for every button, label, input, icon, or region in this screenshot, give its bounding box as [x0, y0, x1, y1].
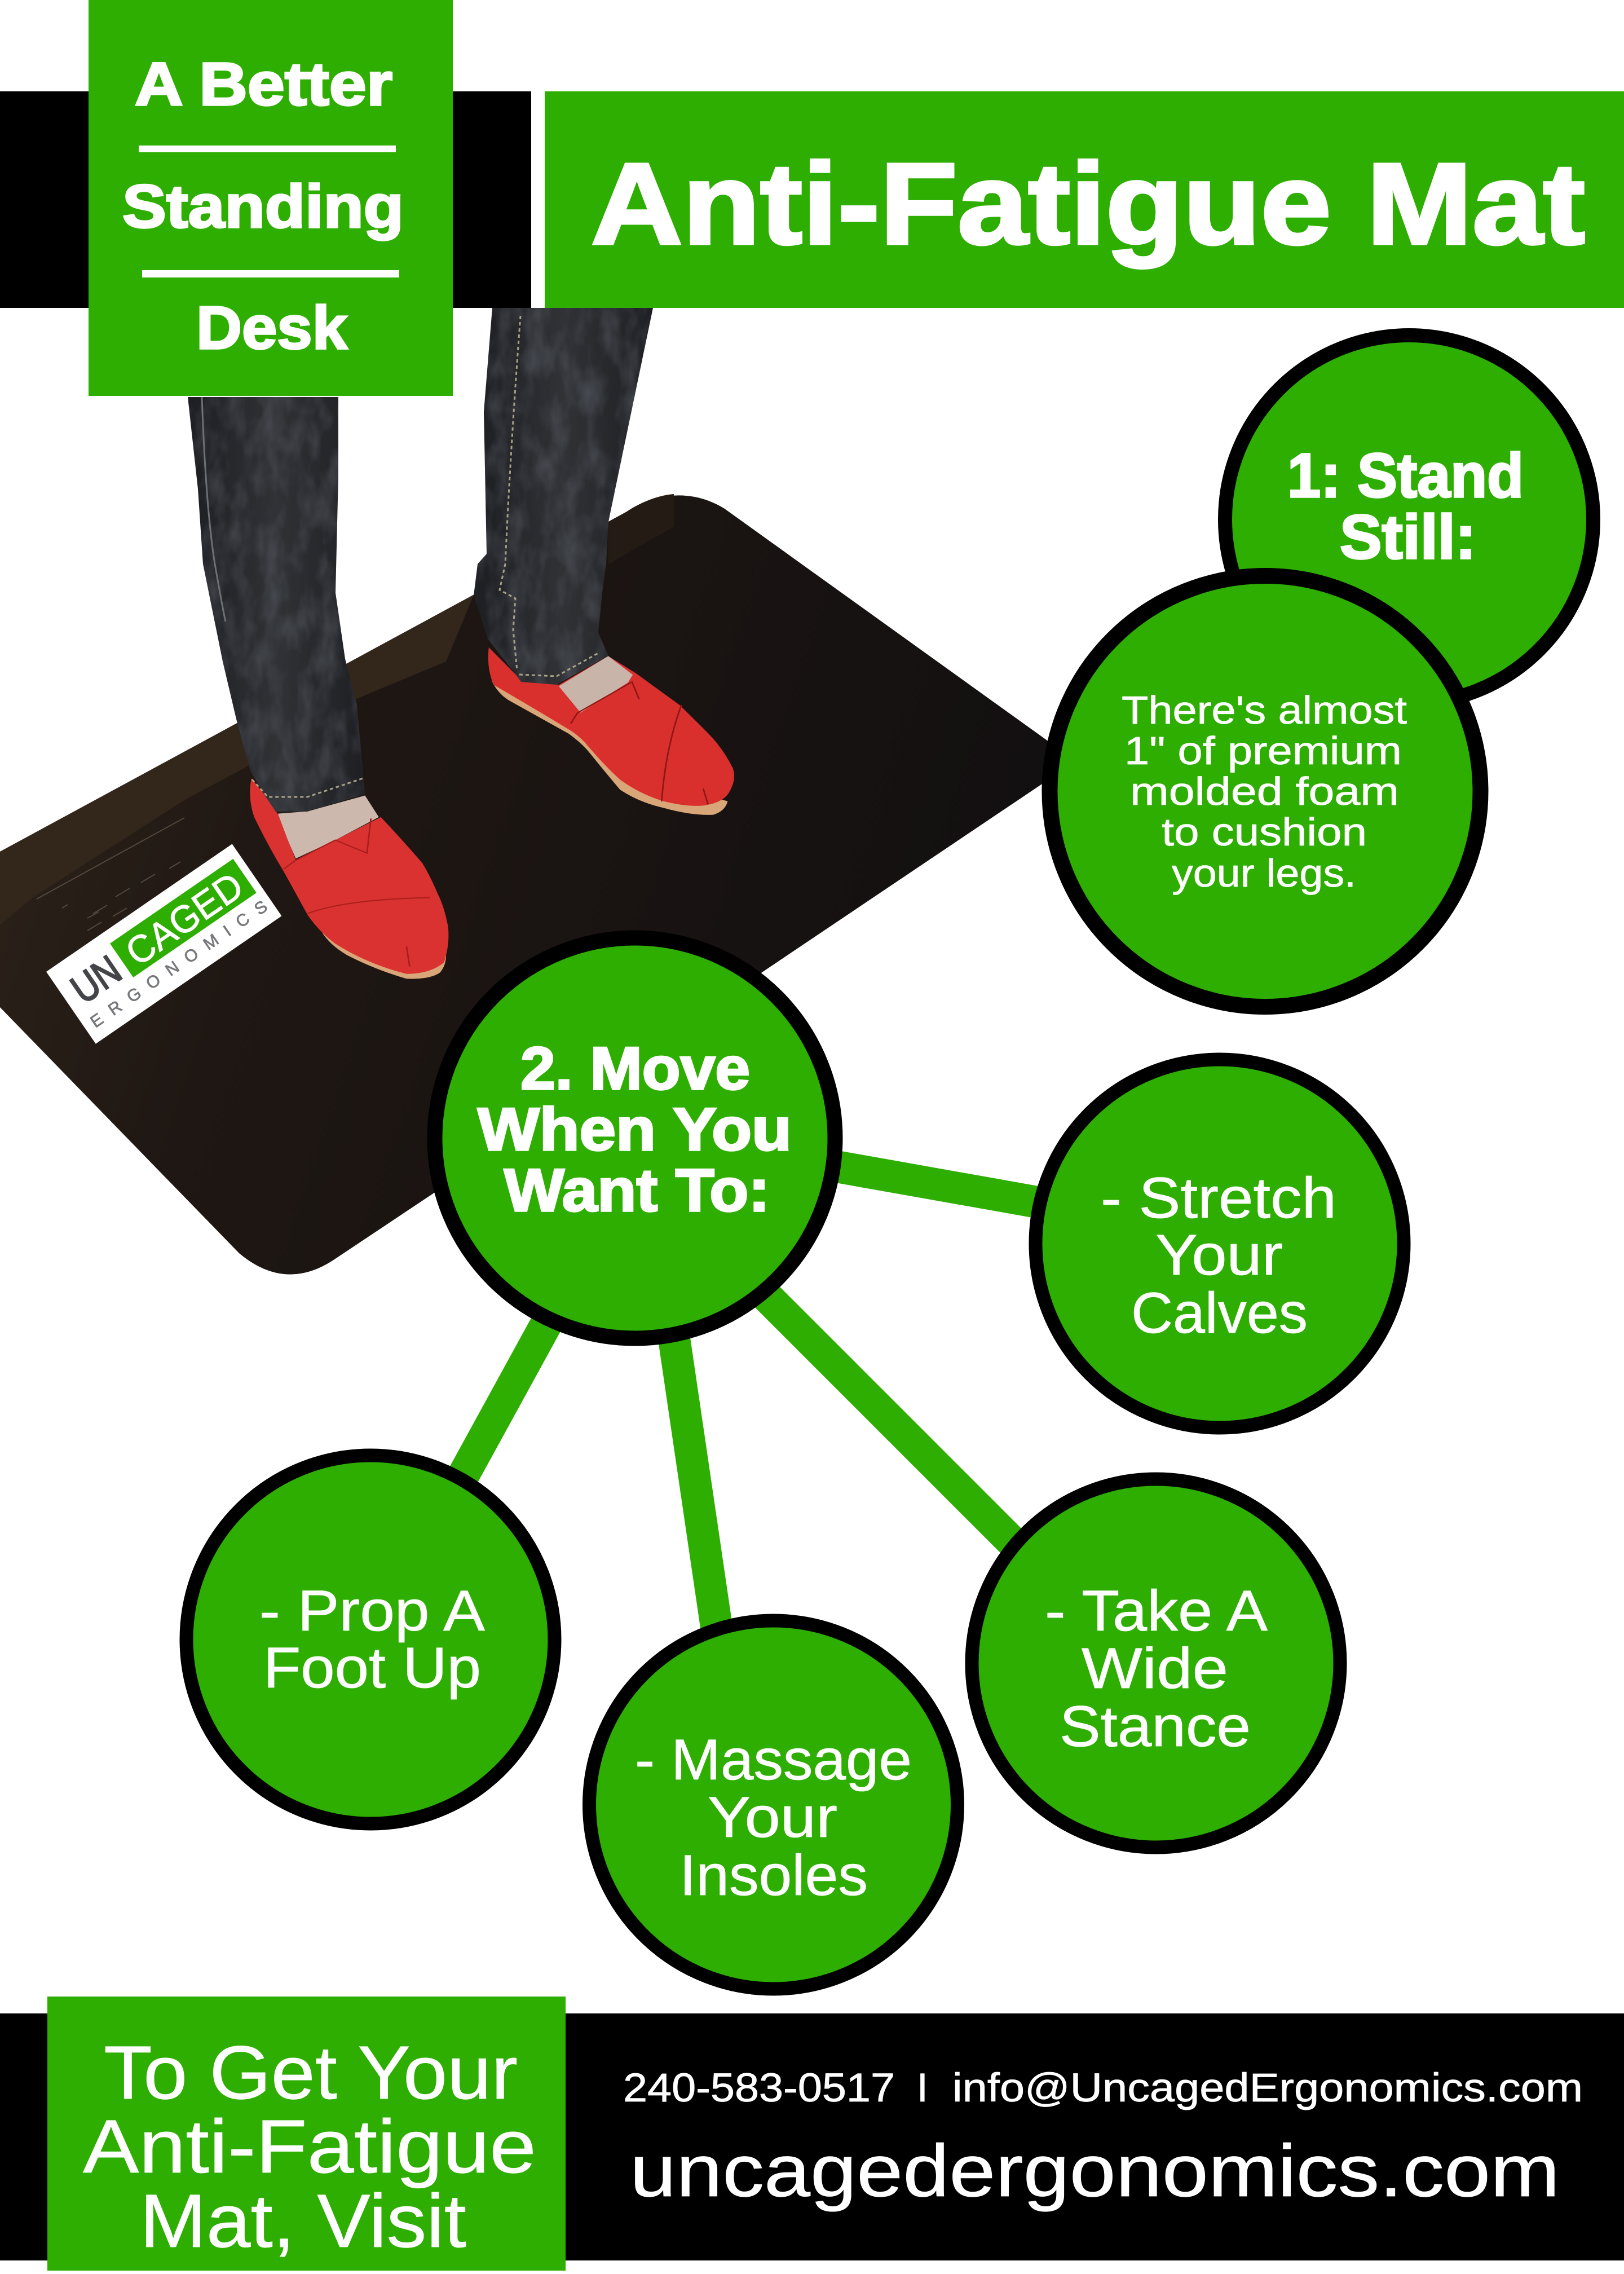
left jeans leg [188, 397, 365, 812]
heading line 2: When You [478, 1095, 792, 1163]
heading line 3: Want To: [504, 1156, 770, 1224]
right hem stitching [519, 653, 598, 676]
left shoe [250, 778, 448, 979]
mat brown band right of leg [608, 494, 674, 564]
text line 3: Calves [1131, 1281, 1308, 1345]
circle: Take A Wide Stance [972, 1479, 1340, 1848]
text line 2: Anti-Fatigue [83, 2105, 536, 2189]
text line 1: There's almost [1122, 688, 1407, 732]
rule 1 [139, 146, 396, 152]
footer black bar [0, 2013, 1624, 2260]
rule 2 [142, 270, 399, 277]
connector: move to stretch [635, 1131, 1220, 1235]
circle: Massage Your Insoles [589, 1621, 957, 1989]
text: A Better: A Better [135, 50, 392, 118]
left shoe sole [320, 928, 446, 979]
circle shape [589, 1621, 957, 1989]
heading line 1: 2. Move [520, 1034, 750, 1102]
right shoe upper [488, 647, 734, 806]
circle shape [435, 938, 835, 1338]
circle shape [972, 1479, 1340, 1848]
text line 1: - Take A [1045, 1579, 1268, 1643]
text line 3: Mat, Visit [140, 2179, 466, 2263]
connector: move to wide stance [677, 1206, 1100, 1629]
right shoe sole [492, 681, 728, 815]
text: Desk: Desk [196, 293, 348, 362]
mat brown top band [0, 595, 474, 925]
right leg shape [474, 308, 653, 685]
circle: Prop A Foot Up [186, 1455, 555, 1824]
text line 1: - Stretch [1101, 1166, 1336, 1230]
connector: move to prop [412, 1230, 598, 1570]
mat embossed text [37, 818, 184, 931]
text line 2: Your [1155, 1223, 1283, 1287]
right shoe foot [559, 656, 633, 713]
circle: foam description [1050, 576, 1481, 1007]
left hem stitching [252, 778, 363, 797]
circle shape [1225, 335, 1594, 704]
logo background [46, 844, 281, 1044]
panel: A Better Standing Desk [89, 0, 453, 396]
phone number: 240-583-0517 [623, 2066, 895, 2110]
text line 1: - Massage [635, 1727, 912, 1792]
banner background [545, 91, 1624, 308]
panel background [47, 1997, 566, 2271]
panel background [89, 0, 453, 396]
separator: I [917, 2066, 928, 2110]
website: uncagedergonomics.com [630, 2129, 1560, 2212]
circle shape [186, 1455, 555, 1824]
circle shape [1050, 576, 1481, 1007]
circle: Stretch Your Calves [1035, 1059, 1404, 1428]
left shoe upper [250, 778, 448, 974]
heading line 1: 1: Stand [1287, 441, 1524, 510]
email: info@UncagedErgonomics.com [952, 2066, 1583, 2110]
logo word CAGED: CAGED [118, 864, 251, 974]
text line 1: To Get Your [104, 2031, 518, 2115]
logo word ERGONOMICS: ERGONOMICS [87, 897, 271, 1032]
text line 4: to cushion [1162, 810, 1367, 854]
header: black bar [0, 91, 531, 308]
text line 3: Stance [1060, 1694, 1251, 1759]
mat [0, 495, 1060, 1275]
text line 2: Foot Up [263, 1636, 481, 1700]
photo: anti-fatigue mat with standing legs [0, 308, 1060, 1275]
text line 1: - Prop A [259, 1579, 485, 1643]
left shoe seams [284, 818, 430, 967]
title banner: Anti-Fatigue Mat [545, 91, 1624, 308]
right shoe seams [571, 682, 708, 804]
logo sticker [46, 844, 281, 1044]
left leg seam stitching [202, 397, 226, 622]
text line 5: your legs. [1172, 851, 1356, 895]
circle shape [1035, 1059, 1404, 1428]
call to action panel [47, 1997, 566, 2271]
title text: Anti-Fatigue Mat [591, 139, 1585, 268]
text line 3: Insoles [679, 1843, 868, 1907]
logo green block [110, 859, 257, 977]
footer: contact bar [0, 2013, 1624, 2260]
right shoe [488, 647, 734, 815]
circle: 1 Stand Still [1225, 335, 1594, 704]
heading line 2: Still: [1340, 503, 1476, 572]
left shoe foot [278, 796, 379, 858]
text line 2: Your [708, 1785, 837, 1849]
circle: 2 Move When You Want To [435, 938, 835, 1338]
logo word UN: UN [63, 947, 130, 1012]
text line 3: molded foam [1130, 769, 1399, 813]
text line 2: 1" of premium [1124, 729, 1402, 773]
text line 2: Wide [1082, 1636, 1228, 1700]
left leg shape [188, 397, 365, 812]
right leg seam stitching [500, 316, 520, 671]
text: Standing: Standing [122, 172, 404, 240]
right jeans leg [474, 308, 653, 685]
connector: move to massage [660, 1241, 733, 1740]
